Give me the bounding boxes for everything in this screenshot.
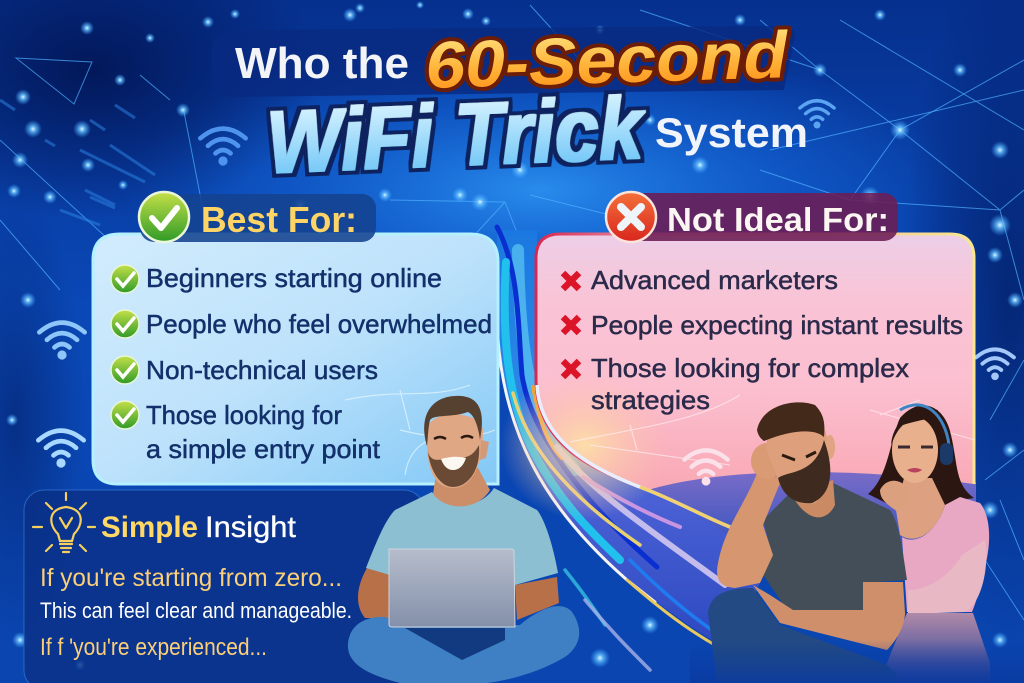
insight line 3: If f 'you're experienced... <box>40 634 267 661</box>
beard and smile <box>428 445 479 487</box>
item 2: People expecting instant results <box>591 310 963 340</box>
title highlight: 60-Second: 60-Second <box>424 17 790 102</box>
title line: Who the: Who the <box>235 39 409 88</box>
hair back <box>868 405 974 532</box>
eyes and lips <box>898 446 933 448</box>
icon: red cross <box>606 192 656 242</box>
skirt <box>880 613 990 683</box>
title backing bar <box>212 26 795 97</box>
neck and chest <box>896 478 945 539</box>
arm <box>908 540 986 614</box>
panel lower wave <box>640 471 976 560</box>
panel: simple insight <box>24 490 424 683</box>
beard <box>778 440 830 503</box>
legs <box>348 606 579 683</box>
face <box>767 425 829 504</box>
not ideal heading <box>606 192 898 242</box>
person: frustrated man <box>708 402 907 683</box>
flowing light ribbon <box>497 227 770 670</box>
item 3: Non-technical users <box>146 355 378 385</box>
head <box>427 414 483 488</box>
ear <box>825 435 835 459</box>
item 4: Those looking for <box>146 400 342 430</box>
raised arm <box>717 473 782 588</box>
hand at chin <box>880 481 911 512</box>
list: best for items <box>111 263 492 464</box>
item 4 <box>111 400 381 464</box>
neck <box>792 480 835 517</box>
icon: wifi in panel <box>684 450 728 486</box>
item 3 <box>563 353 909 415</box>
eyes <box>434 436 473 439</box>
laptop <box>389 549 515 627</box>
title word: System: System <box>655 109 808 156</box>
item 4: a simple entry point <box>146 434 381 464</box>
item 2: People who feel overwhelmed <box>146 309 492 339</box>
headset <box>900 405 949 445</box>
title <box>212 17 808 192</box>
item 3: Those looking for complex <box>591 353 909 383</box>
torso <box>762 483 907 610</box>
icon: green check <box>139 192 189 242</box>
person: happy man with laptop <box>348 396 579 683</box>
legs <box>708 588 905 683</box>
item 1: Advanced marketers <box>591 265 838 295</box>
item 1: Beginners starting online <box>146 263 442 293</box>
face <box>892 417 938 483</box>
panel: simple insight: Insight <box>205 511 297 544</box>
hair <box>757 402 824 441</box>
bottom shade <box>690 640 1024 683</box>
panel: not ideal for <box>500 192 976 560</box>
body <box>902 497 989 612</box>
insight heading: Simple <box>101 511 198 544</box>
hand <box>751 443 783 479</box>
panel network decoration <box>345 385 495 475</box>
best for heading <box>139 192 376 242</box>
brows <box>782 452 816 460</box>
forearm on knee <box>753 582 905 650</box>
neck <box>433 468 490 506</box>
torso <box>366 488 558 600</box>
wifi icons on background <box>38 101 1014 468</box>
person: woman with headset <box>868 405 990 683</box>
icon: light bulb <box>33 493 95 552</box>
arms <box>358 568 559 620</box>
not ideal heading: Not Ideal For: <box>667 201 889 238</box>
title highlight: WiFi Trick: WiFi Trick <box>265 78 648 192</box>
insight line 1: If you're starting from zero... <box>40 564 342 592</box>
insight line 2: This can feel clear and manageable. <box>40 598 352 623</box>
hair <box>424 396 482 446</box>
list: not ideal items <box>563 265 963 415</box>
best for heading: Best For: <box>201 199 357 240</box>
panel network decoration <box>570 395 975 465</box>
panel: best for <box>93 192 498 484</box>
item 3: strategies <box>591 385 710 415</box>
